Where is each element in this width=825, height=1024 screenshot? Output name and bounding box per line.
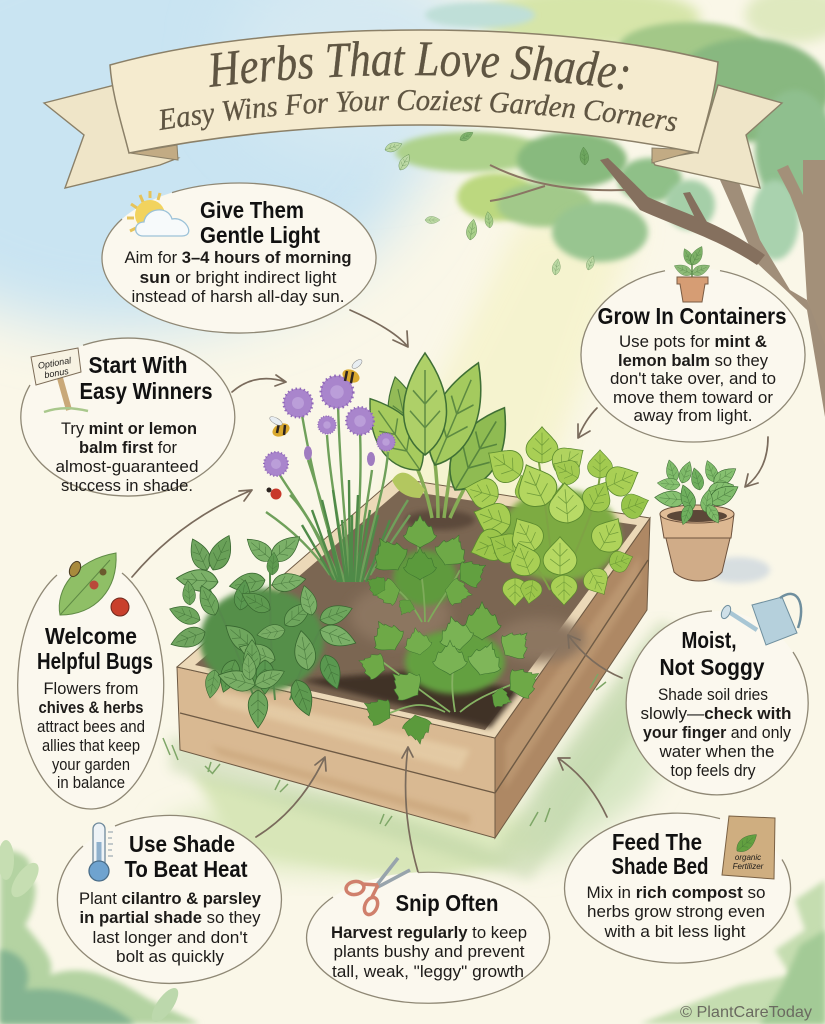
bubble: start with easy winners: Easy Winners: [80, 378, 212, 404]
bubble: grow in containers: [581, 244, 805, 442]
icon: fertilizer bag: Fertilizer: [733, 862, 764, 871]
bubble: start with easy winners: almost-guaranteed: [56, 458, 198, 476]
mint plant: [167, 530, 359, 728]
left face: [177, 667, 495, 838]
grass tufts: [163, 674, 606, 826]
bubble: moist not soggy: Moist,: [682, 627, 736, 653]
bubble: start with easy winners: Try mint or lemon: [61, 420, 197, 438]
bubble: snip often: tall, weak, "leggy" growth: [332, 963, 524, 981]
bubble: snip often: [307, 858, 550, 1003]
arrow: winners to chives: [232, 375, 286, 392]
banner ribbon: [110, 30, 718, 153]
bubble: snip often: plants bushy and prevent: [334, 943, 525, 961]
main branch: [600, 158, 765, 265]
banner right tail: [652, 85, 782, 188]
bubble: welcome helpful bugs: in balance: [57, 774, 125, 792]
bubble: use shade to beat heat: in partial shade so they: [80, 909, 261, 927]
arrow: heat to bed: [256, 757, 326, 837]
bubble: use shade to beat heat: bolt as quickly: [116, 948, 225, 966]
bubble: moist not soggy: top feels dry: [670, 762, 756, 780]
corner foliage: [0, 840, 825, 1024]
banner fold shadows: [130, 145, 698, 163]
icon: fertilizer bag: [722, 816, 775, 879]
bubble: welcome helpful bugs: Helpful Bugs: [37, 648, 153, 674]
icon: seedling pot: [672, 244, 712, 302]
icon: sun and cloud: [127, 191, 189, 236]
bubble: use shade to beat heat: Use Shade: [129, 831, 235, 857]
bubble: snip often: Harvest regularly to keep: [331, 924, 527, 942]
right face: [495, 518, 650, 838]
bubble: moist not soggy: water when the: [658, 743, 774, 761]
arrow: containers to lemon balm: [578, 408, 597, 438]
bubble: feed the shade bed: Shade Bed: [612, 853, 708, 879]
bubble: give them gentle light: Gentle Light: [200, 222, 320, 248]
arrows: [132, 310, 768, 872]
arrow: bugs to chives: [132, 490, 252, 577]
icon: optional bonus sign: [31, 348, 88, 412]
bubble: grow in containers: away from light.: [634, 407, 752, 425]
bubble: welcome helpful bugs: your garden: [52, 756, 130, 774]
bubble: give them gentle light: instead of harsh all-day sun.: [132, 288, 344, 306]
bubble: moist not soggy: your finger and only: [643, 724, 792, 742]
lemon balm plant: [461, 427, 653, 606]
bubble: moist not soggy: slowly—check with: [640, 705, 792, 723]
bubble: give them gentle light: Aim for 3–4 hours of morning: [124, 249, 352, 267]
arrow: gentle light to bed: [350, 310, 408, 347]
icon: thermometer: [89, 823, 113, 881]
icon: bees and ladybug: [266, 358, 364, 500]
soil: [195, 490, 637, 730]
cilantro plant: [362, 515, 493, 622]
chives: [264, 376, 410, 582]
bubble: snip often: Snip Often: [396, 890, 498, 916]
icon: optional bonus sign: Optional: [37, 355, 73, 371]
bubble: feed the shade bed: [564, 813, 791, 963]
potted mint: [654, 458, 770, 583]
bubble: feed the shade bed: Mix in rich compost so: [586, 884, 766, 902]
arrow: snip to bed: [402, 747, 418, 872]
bubble: grow in containers: lemon balm so they: [618, 352, 769, 370]
banner left tail: [44, 85, 178, 188]
bubble: grow in containers: Use pots for mint &: [619, 333, 767, 351]
bubble: welcome helpful bugs: allies that keep: [42, 737, 140, 755]
bubble: start with easy winners: success in shade.: [61, 477, 193, 495]
bubble: start with easy winners: Start With: [88, 352, 188, 378]
bubble: feed the shade bed: with a bit less light: [603, 923, 746, 941]
bubble: grow in containers: move them toward or: [613, 389, 774, 407]
tree trunk: [720, 177, 825, 417]
bubble: welcome helpful bugs: Flowers from: [44, 680, 138, 698]
icon: watering can: [719, 594, 801, 645]
icon: scissors: [345, 858, 410, 917]
bubble: welcome helpful bugs: Welcome: [45, 623, 137, 649]
raised garden bed: [163, 478, 700, 880]
bubble: use shade to beat heat: last longer and don't: [92, 929, 248, 947]
tree: [384, 0, 825, 417]
title banner: [42, 29, 784, 189]
parsley plant: [354, 602, 547, 747]
bubble: moist not soggy: Shade soil dries: [658, 686, 768, 704]
bubble: feed the shade bed: herbs grow strong even: [587, 903, 765, 921]
bubble: welcome helpful bugs: attract bees and: [37, 718, 145, 736]
bubble: give them gentle light: Give Them: [200, 197, 304, 223]
bubble: grow in containers: Grow In Containers: [598, 303, 786, 329]
bubble: give them gentle light: [102, 183, 376, 333]
icon: leaf with ladybugs: [59, 553, 129, 616]
bubble: use shade to beat heat: Plant cilantro & parsley: [79, 890, 262, 908]
pot: [664, 530, 732, 581]
arrow: containers to pot: [745, 437, 768, 487]
bubble: start with easy winners: balm first for: [79, 439, 178, 457]
arrow: feed to bed: [558, 758, 607, 817]
bed shadow: [170, 620, 700, 880]
bubble: start with easy winners: [21, 338, 235, 496]
rim: [177, 478, 650, 738]
title line 1: Herbs That Love Shade:: [209, 41, 628, 90]
bubble: welcome helpful bugs: [18, 553, 164, 809]
arrow: moist to bed: [568, 635, 622, 678]
sorrel plant: [354, 353, 523, 518]
bubble: feed the shade bed: Feed The: [612, 829, 702, 855]
icon: optional bonus sign: bonus: [44, 366, 70, 380]
icon: fertilizer bag: organic: [735, 853, 761, 862]
copyright: © PlantCareToday: [680, 1004, 812, 1021]
bubble: moist not soggy: Not Soggy: [660, 654, 765, 680]
bubble: welcome helpful bugs: chives & herbs: [38, 699, 144, 717]
bubble: moist not soggy: [626, 594, 808, 795]
bubble: use shade to beat heat: To Beat Heat: [124, 856, 248, 882]
bubble: use shade to beat heat: [57, 815, 282, 983]
bubble: give them gentle light: sun or bright indirect light: [140, 269, 337, 287]
title line 2: Easy Wins For Your Coziest Garden Corners: [160, 90, 678, 132]
bubble: grow in containers: don't take over, and to: [610, 370, 776, 388]
